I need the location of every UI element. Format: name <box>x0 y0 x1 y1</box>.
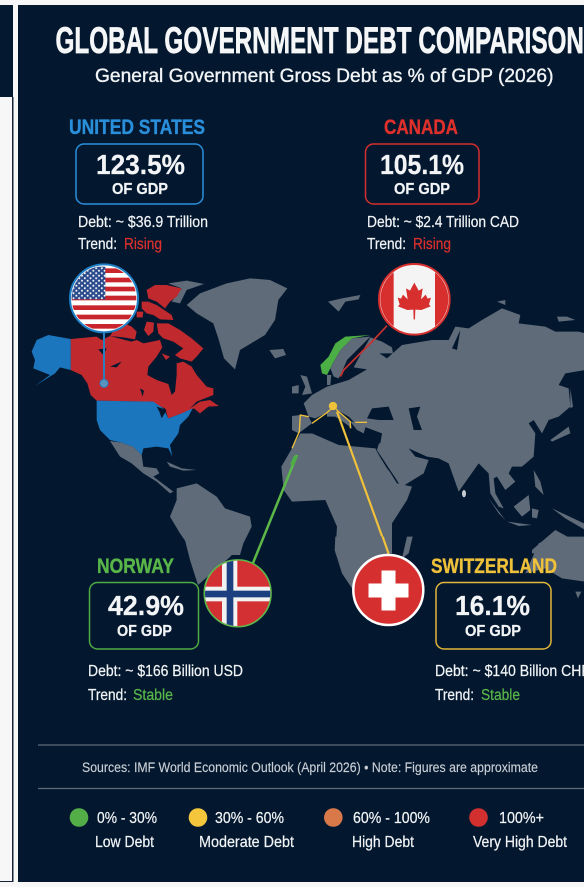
legend: very high debt <box>469 808 568 851</box>
trend text: Rising <box>413 236 451 253</box>
canada <box>71 285 219 418</box>
pin: united states <box>100 332 108 387</box>
value box: OF GDP <box>465 623 521 640</box>
legend: low debt <box>70 808 157 851</box>
land: italy and greece <box>327 410 367 433</box>
americas <box>32 278 287 555</box>
switzerland highlight lines <box>291 402 384 537</box>
southern tip of south america <box>185 540 245 585</box>
value box: OF GDP <box>394 181 450 198</box>
value box: OF GDP <box>112 181 168 198</box>
panel: switzerland <box>431 555 584 704</box>
trend text <box>78 236 162 253</box>
usa <box>32 335 193 457</box>
trend text: Stable <box>481 687 520 704</box>
trend text <box>88 687 173 704</box>
sri lanka <box>462 490 466 497</box>
debt text: Debt: ~ $36.9 Trillion <box>78 214 208 231</box>
leader line: norway <box>253 455 297 563</box>
green coast marker <box>292 456 296 465</box>
panel: united states <box>69 116 208 253</box>
trend text <box>435 687 520 704</box>
left neighbouring panel edge <box>0 5 14 882</box>
world map <box>32 278 584 598</box>
legend: moderate debt: 30% - 60% <box>215 810 284 827</box>
legend: very high debt: Very High Debt <box>473 834 568 851</box>
panel: canada <box>366 116 519 253</box>
icon: us flag <box>70 264 140 332</box>
value box <box>90 582 198 649</box>
trend text: Rising <box>124 236 162 253</box>
legend: moderate debt: Moderate Debt <box>199 834 295 851</box>
legend <box>70 808 568 851</box>
value box: OF GDP <box>117 623 172 640</box>
trend text <box>367 236 451 253</box>
trend text: Trend: <box>88 687 127 704</box>
land: greenland and arctic <box>168 278 287 369</box>
country heading: CANADA <box>384 116 458 139</box>
legend: low debt: 0% - 30% <box>97 810 157 827</box>
value box <box>76 144 203 204</box>
leader line: canada <box>340 326 387 377</box>
great lakes and inland water <box>98 348 167 418</box>
icon: norway flag <box>203 560 273 627</box>
trend text: Trend: <box>435 687 474 704</box>
legend: very high debt: 100%+ <box>499 810 544 827</box>
leader line: switzerland lower <box>383 537 389 554</box>
legend: high debt: 60% - 100% <box>353 810 430 827</box>
debt text: Debt: ~ $166 Billion USD <box>88 663 243 680</box>
legend: high debt: High Debt <box>352 834 415 851</box>
trend text: Trend: <box>367 236 406 253</box>
value box: 105.1% <box>380 149 464 180</box>
land: mexico central america south america <box>110 441 252 555</box>
land: old world <box>281 295 584 553</box>
sources note: Sources: IMF World Economic Outlook (April 2026) • Note: Figures are approximate <box>82 760 538 775</box>
lower map: africa south and australia <box>335 537 584 598</box>
legend: low debt: Low Debt <box>95 834 155 851</box>
country heading: UNITED STATES <box>69 116 205 139</box>
value box: 123.5% <box>96 149 185 180</box>
value box <box>366 144 479 204</box>
seas <box>299 330 460 483</box>
icon: switzerland flag <box>353 555 423 625</box>
trend text: Stable <box>133 687 173 704</box>
value box: 42.9% <box>108 590 184 621</box>
debt text: Debt: ~ $2.4 Trillion CAD <box>367 214 519 231</box>
norway highlight <box>320 335 370 375</box>
icon: canada flag <box>379 263 450 335</box>
eurasia and africa <box>281 295 584 553</box>
country heading: SWITZERLAND <box>431 555 557 578</box>
land: southern tips <box>335 537 584 598</box>
legend: high debt <box>324 808 430 851</box>
value box: 16.1% <box>455 590 530 621</box>
trend text: Trend: <box>78 236 117 253</box>
country heading: NORWAY <box>97 555 174 578</box>
legend: moderate debt <box>189 808 295 851</box>
panel: norway <box>88 555 243 704</box>
subtitle: General Government Gross Debt as % of GDP (2026) <box>95 66 554 87</box>
value box <box>436 582 551 649</box>
